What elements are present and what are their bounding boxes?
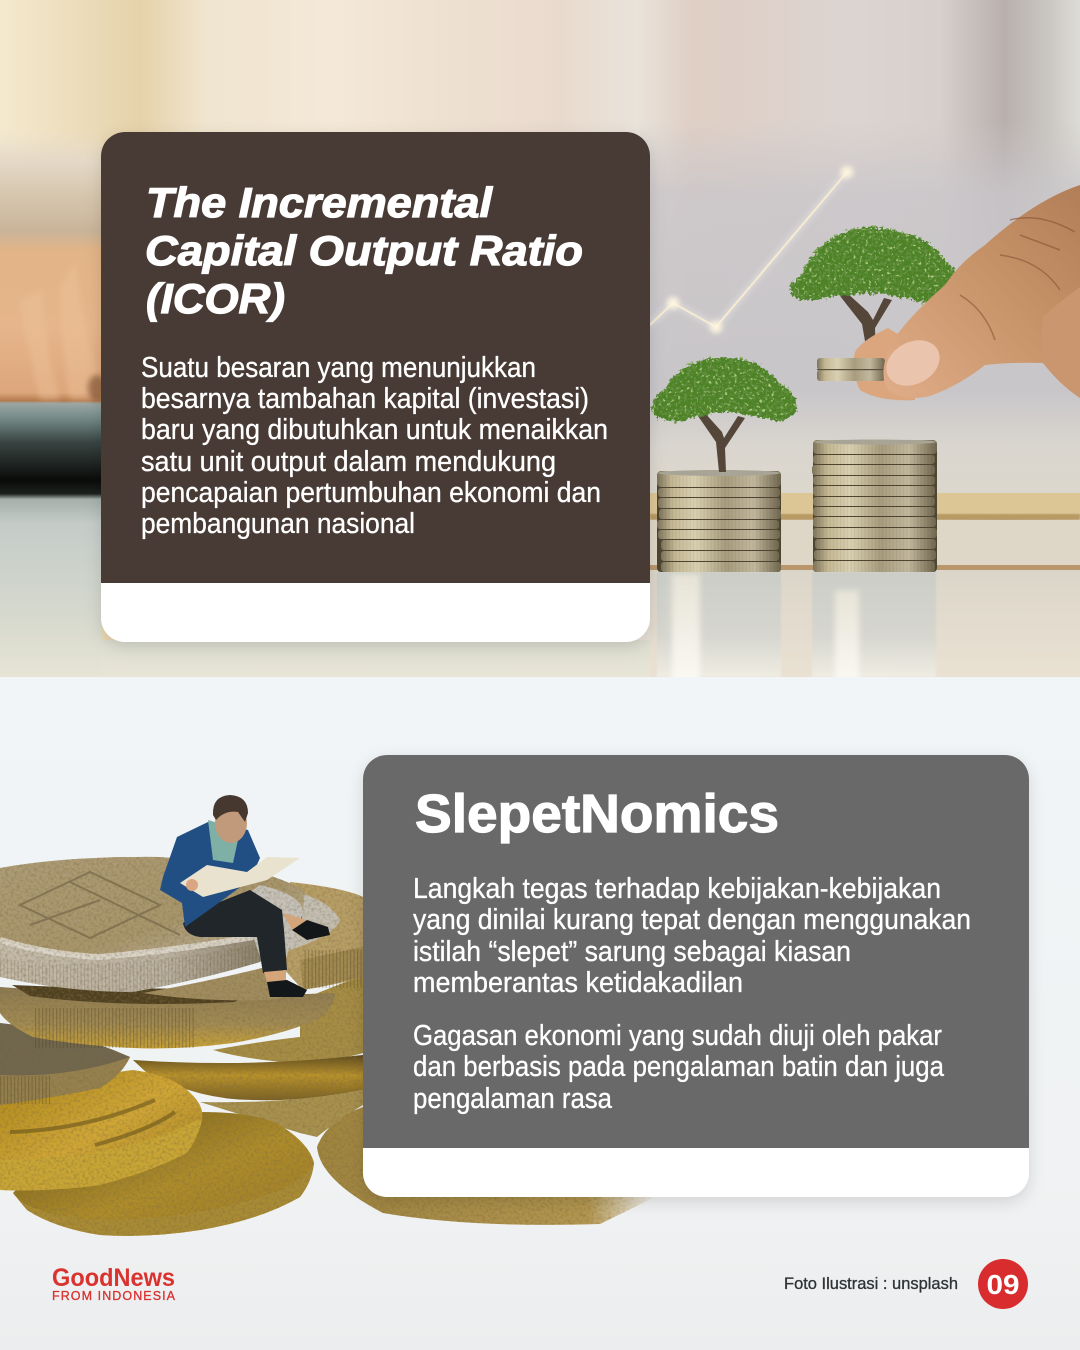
coin: left mid xyxy=(0,1023,130,1105)
text block: ICOR description: besarnya tambahan kapital (investasi) xyxy=(141,383,589,415)
text block: SlepetNomics first paragraph: memberantas ketidakadilan xyxy=(413,967,743,999)
heading: ICOR title: The Incremental xyxy=(146,179,493,226)
background: lower panel xyxy=(0,677,1080,1350)
text block: SlepetNomics second paragraph: Gagasan ekonomi yang sudah diuji oleh pakar xyxy=(413,1020,942,1052)
text block: ICOR description: pencapaian pertumbuhan ekonomi dan xyxy=(141,477,601,509)
page number badge: 09 xyxy=(986,1269,1020,1300)
logo: GoodNews from Indonesia: GoodNews xyxy=(52,1264,175,1292)
coin: rear right gold xyxy=(280,882,363,990)
coin: gold under silver xyxy=(0,987,335,1048)
text block: ICOR description: baru yang dibutuhkan untuk menaikkan xyxy=(141,414,608,446)
text block: SlepetNomics first paragraph: yang dinilai kurang tepat dengan menggunakan xyxy=(413,904,971,936)
tree: right xyxy=(790,225,956,342)
text block: ICOR description: satu unit output dalam mendukung xyxy=(141,446,556,478)
coin: front left xyxy=(0,1070,202,1190)
text block: ICOR description: pembangunan nasional xyxy=(141,508,415,540)
logo: GoodNews from Indonesia xyxy=(52,1264,176,1303)
text block: SlepetNomics second paragraph: dan berbasis pada pengalaman batin dan juga xyxy=(413,1051,944,1083)
tree: left xyxy=(652,357,797,472)
page number badge xyxy=(978,1259,1028,1309)
heading: ICOR title: Capital Output Ratio xyxy=(145,227,583,274)
photo credit: Foto Ilustrasi : unsplash xyxy=(784,1275,958,1293)
coin: middle stacked xyxy=(133,1055,363,1100)
hand holding coins xyxy=(817,185,1080,400)
figurine: man reading newspaper xyxy=(160,795,330,997)
coin: right stacked xyxy=(213,975,363,1063)
coin: gold plate under silver right xyxy=(143,968,303,1000)
text block: ICOR description xyxy=(141,352,608,540)
coin pile xyxy=(0,857,655,1236)
coin stack: left xyxy=(657,470,781,572)
coins held between fingers xyxy=(817,358,885,381)
coin stack: right xyxy=(812,440,937,572)
logo: GoodNews from Indonesia: FROM INDONESIA xyxy=(52,1289,176,1303)
panel: SlepetNomics card xyxy=(363,755,1029,1197)
coin: lower stacked xyxy=(200,1090,363,1137)
coin: far right behind card xyxy=(317,1100,655,1225)
text block: ICOR description: Suatu besaran yang menunjukkan xyxy=(141,352,536,384)
photo: figurine reading on coin pile xyxy=(0,795,655,1236)
coin: bottom large xyxy=(13,1112,314,1236)
text block: SlepetNomics first paragraph: Langkah tegas terhadap kebijakan-kebijakan xyxy=(413,873,941,905)
text block: SlepetNomics first paragraph: istilah “slepet” sarung sebagai kiasan xyxy=(413,936,851,968)
heading: ICOR title xyxy=(145,179,583,322)
heading: ICOR title: (ICOR) xyxy=(146,275,285,322)
text block: SlepetNomics second paragraph xyxy=(413,1020,944,1115)
photo: hand placing coins with growing trees xyxy=(0,0,1080,684)
text block: SlepetNomics second paragraph: pengalaman rasa xyxy=(413,1083,612,1115)
text block: SlepetNomics first paragraph xyxy=(413,873,971,999)
coin: silver top xyxy=(0,857,303,992)
chart line: rising trend xyxy=(650,166,853,333)
panel: ICOR definition card xyxy=(101,132,650,642)
heading: SlepetNomics: SlepetNomics xyxy=(415,784,779,844)
